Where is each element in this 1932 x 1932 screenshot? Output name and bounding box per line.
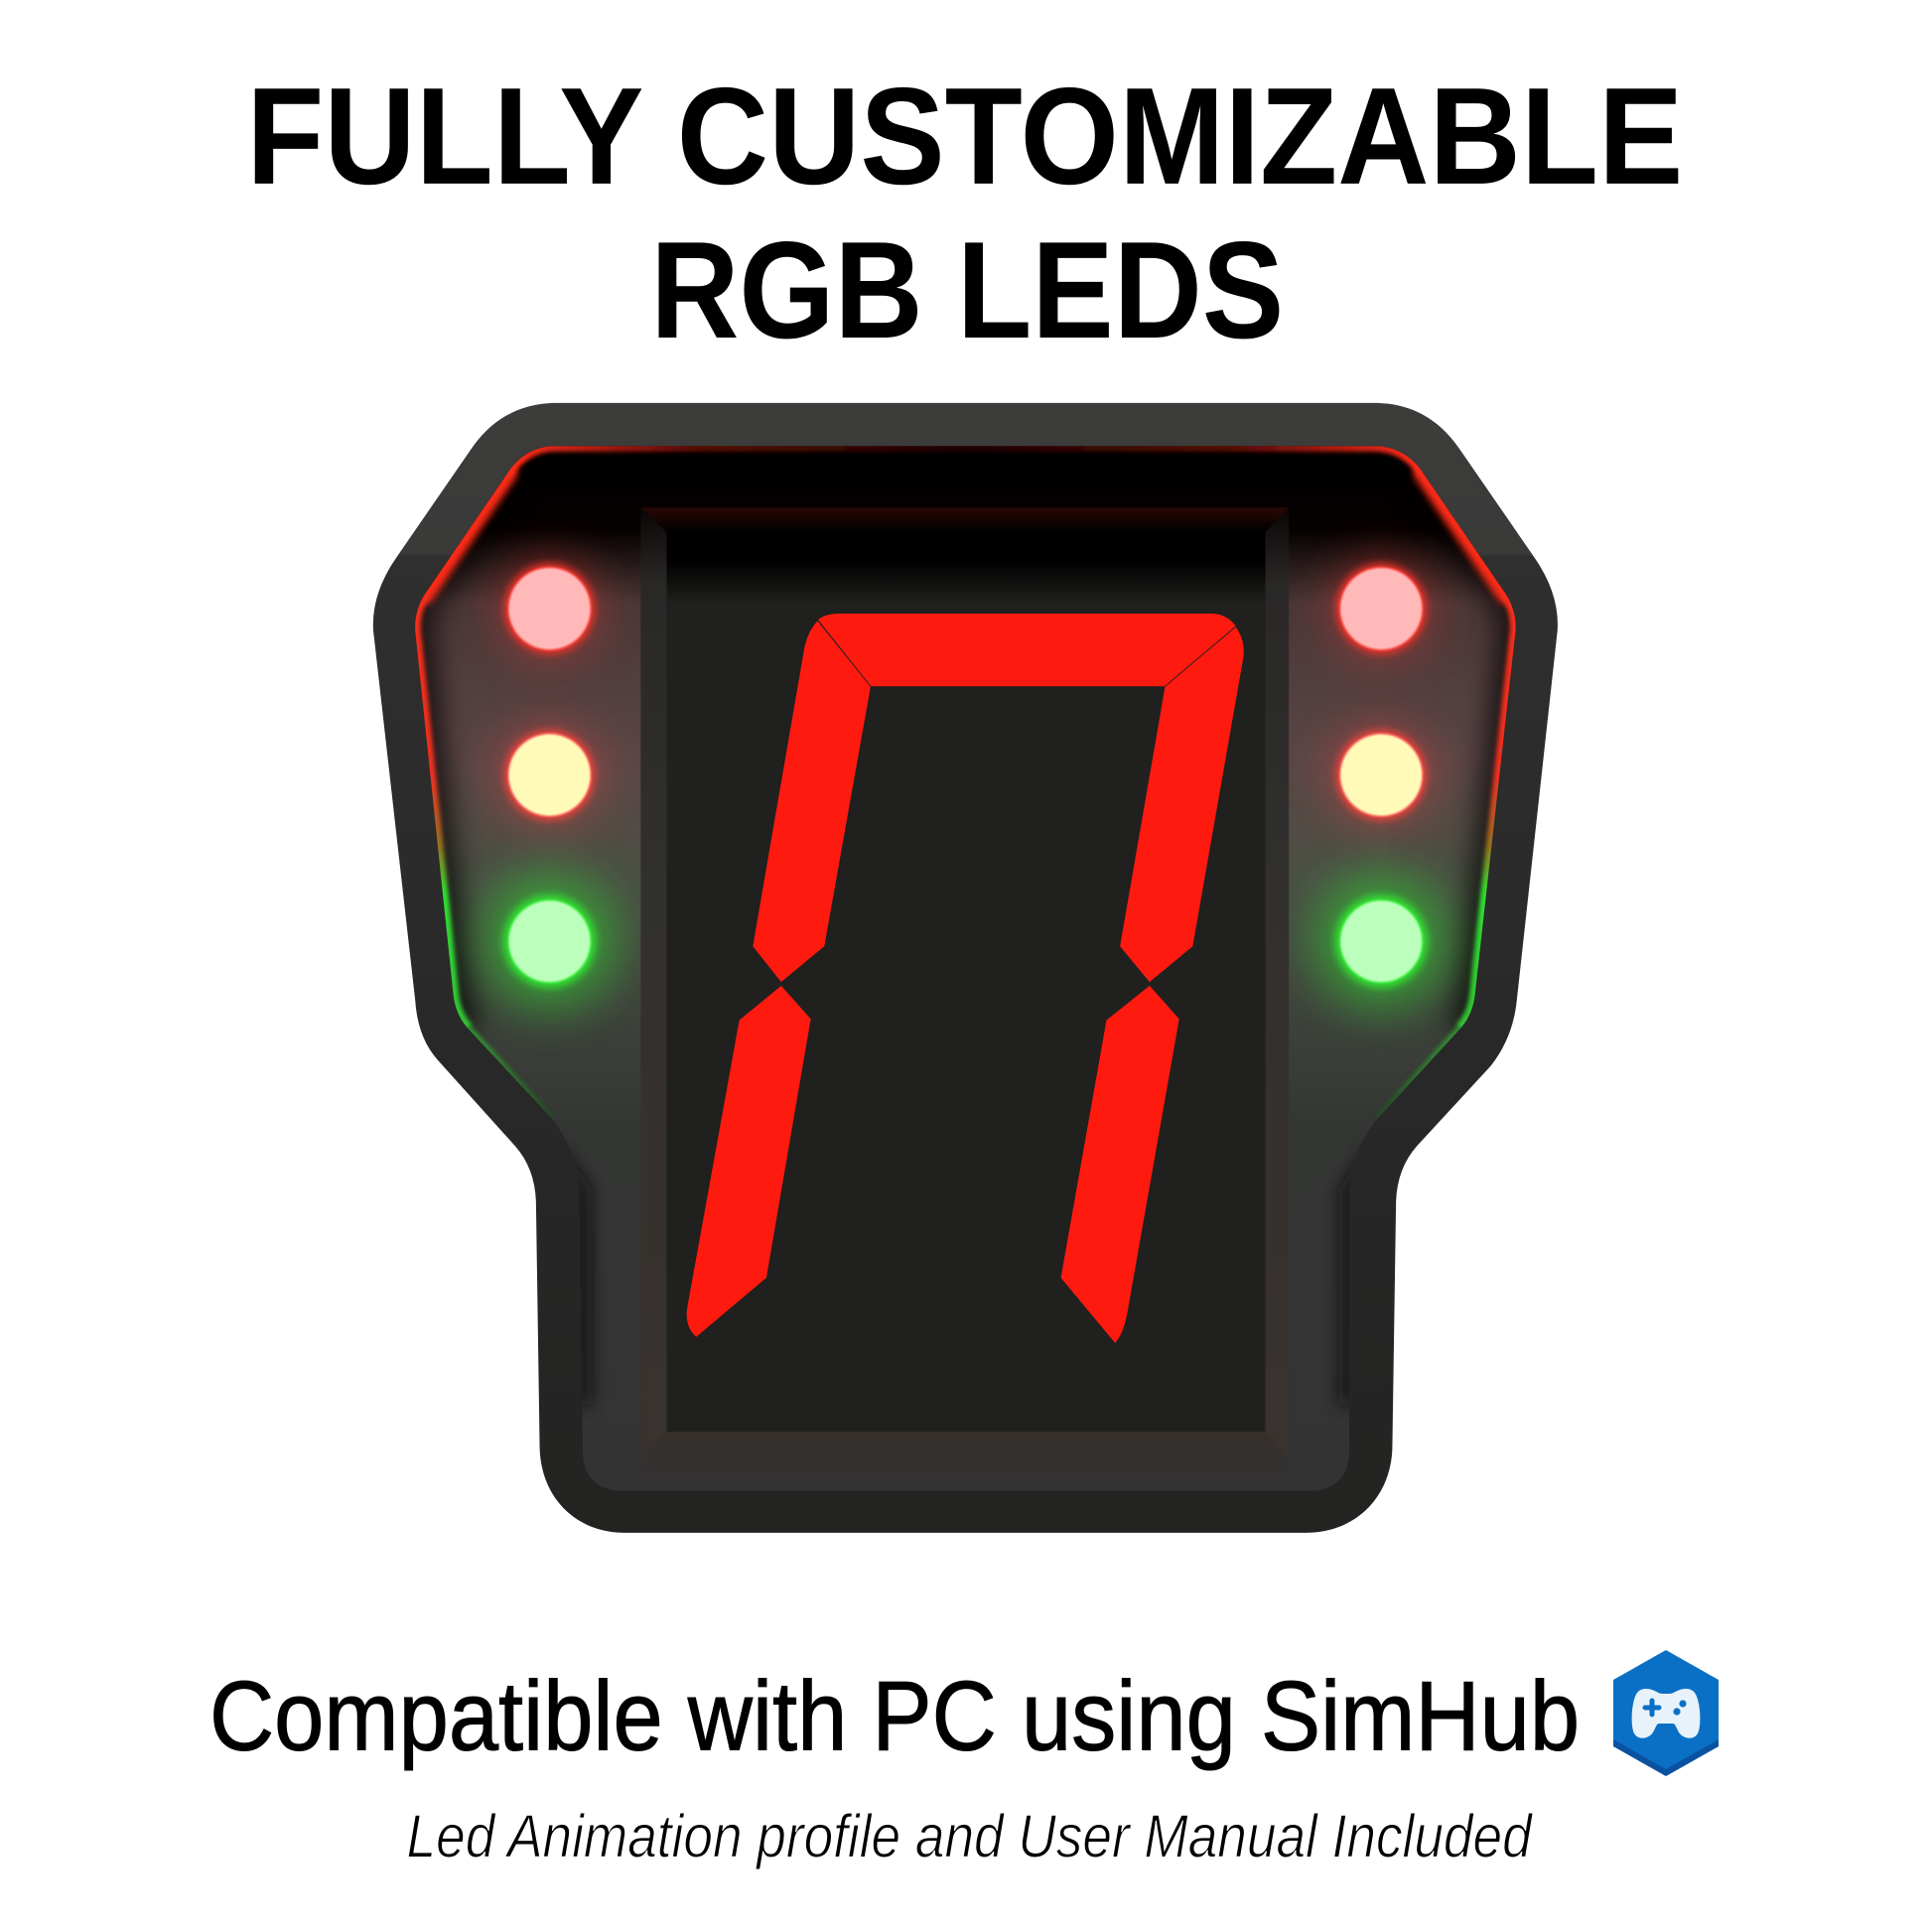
display screen: [666, 532, 1266, 1432]
infographic canvas: [213, 87, 1720, 1868]
tagline: Led Animation profile and User Manual Included: [407, 1802, 1534, 1869]
LED: yellow: [508, 734, 591, 816]
segment: lower left: [687, 986, 811, 1337]
title: FULLY CUSTOMIZABLE: [246, 60, 1683, 213]
title: [246, 60, 1683, 367]
LED: green: [1340, 900, 1423, 983]
segment: lower right: [1061, 986, 1179, 1343]
LED: red: [1340, 568, 1423, 650]
LED column: right: [1334, 563, 1428, 988]
device: shift light display: [373, 403, 1558, 1533]
segment: upper right: [1120, 627, 1244, 982]
inner cavity with lighting: [407, 438, 1528, 1497]
device outer shell: [373, 403, 1558, 1533]
title: RGB LEDS: [650, 213, 1284, 367]
icon: SimHub hexagon gamepad: [1613, 1650, 1719, 1776]
LED: green: [508, 900, 591, 983]
LED halo: left: [502, 563, 597, 988]
segment: upper left: [753, 621, 871, 982]
LED: yellow: [1340, 734, 1423, 816]
segment: top: [818, 614, 1236, 686]
LED halo: right: [1334, 563, 1428, 988]
display bezel: [640, 507, 1289, 1484]
seven-segment digit: [687, 614, 1244, 1343]
compatibility line: Compatible with PC using SimHub: [209, 1661, 1580, 1771]
LED column: left: [502, 563, 597, 988]
screen top shadow: [666, 532, 1266, 607]
LED: red: [508, 568, 591, 650]
